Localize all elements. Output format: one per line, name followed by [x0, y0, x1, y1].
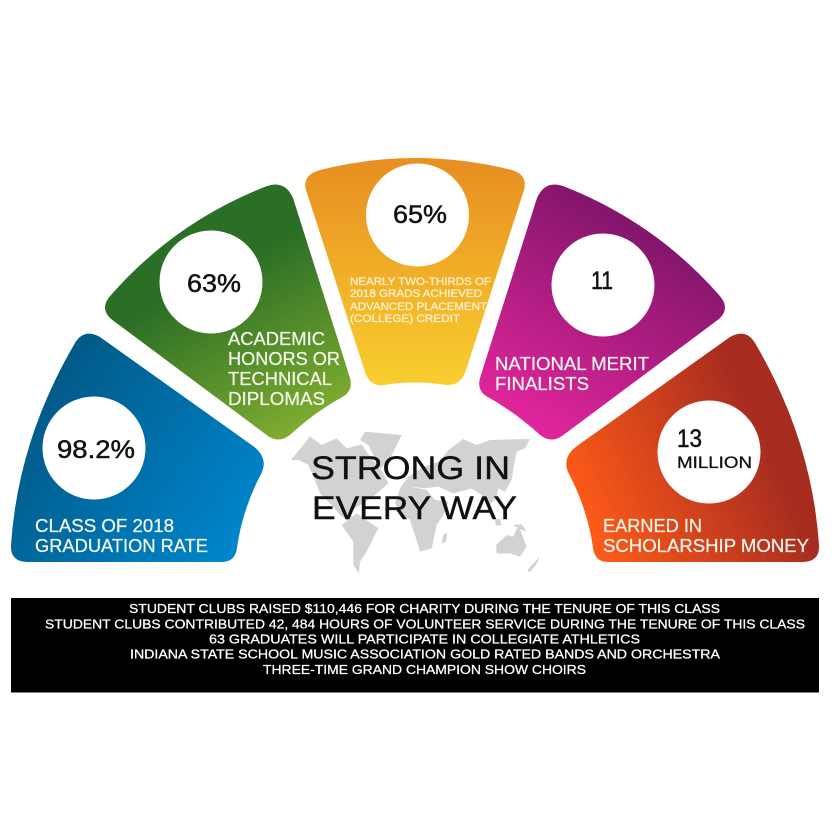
label: scholarship money: SCHOLARSHIP MONEY: [603, 536, 809, 556]
label: academic honors: [228, 329, 340, 409]
badge: 98.2%: [42, 396, 146, 500]
wedge: blue: [11, 334, 264, 562]
label: academic honors: TECHNICAL: [228, 369, 332, 389]
wedge: purple: [479, 184, 725, 440]
panel: advanced placement: [305, 158, 525, 385]
panel: academic honors: [105, 184, 351, 440]
label: scholarship money: [603, 516, 809, 556]
panel: national merit: [479, 184, 725, 440]
banner: additional achievements: STUDENT CLUBS CONTRIBUTED 42, 484 HOURS OF VOLUNTEER SERVICE DURING THE TENURE OF THIS CLASS: [45, 618, 805, 632]
title: EVERY WAY: [312, 490, 517, 526]
banner: additional achievements: [11, 598, 819, 692]
wedge: green: [105, 184, 351, 440]
title: STRONG IN: [311, 450, 510, 486]
banner: additional achievements: 63 GRADUATES WILL PARTICIPATE IN COLLEGIATE ATHLETICS: [209, 632, 640, 646]
label: graduation rate: GRADUATION RATE: [35, 536, 208, 556]
badge: 63%: 63%: [187, 270, 241, 298]
label: graduation rate: CLASS OF 2018: [35, 516, 174, 536]
label: advanced placement: ADVANCED PLACEMENT: [350, 301, 487, 313]
world map: [291, 432, 540, 573]
label: academic honors: ACADEMIC: [228, 329, 325, 349]
badge: 13 million: 13: [677, 425, 702, 453]
badge: 98.2%: 98.2%: [57, 436, 135, 464]
banner: additional achievements: THREE-TIME GRAND CHAMPION SHOW CHOIRS: [263, 663, 586, 677]
badge: 11: [552, 234, 654, 336]
label: advanced placement: [350, 276, 491, 325]
banner: additional achievements: INDIANA STATE SCHOOL MUSIC ASSOCIATION GOLD RATED BANDS AND ORCHESTRA: [130, 648, 721, 662]
badge: 65%: 65%: [393, 201, 447, 229]
banner: additional achievements: STUDENT CLUBS RAISED $110,446 FOR CHARITY DURING THE TENURE OF THIS CLASS: [129, 602, 720, 616]
badge: 63%: [160, 230, 262, 334]
label: national merit: FINALISTS: [495, 374, 589, 394]
label: advanced placement: 2018 GRADS ACHIEVED: [350, 288, 482, 300]
label: advanced placement: (COLLEGE) CREDIT: [350, 313, 460, 325]
label: academic honors: HONORS OR: [228, 349, 340, 369]
badge: 13 million: MILLION: [677, 453, 752, 472]
label: national merit: [495, 354, 649, 394]
wedge: red: [566, 334, 819, 562]
label: national merit: NATIONAL MERIT: [495, 354, 649, 374]
panel: scholarship money: [566, 334, 819, 562]
panel: graduation rate: [11, 334, 264, 562]
label: advanced placement: NEARLY TWO-THIRDS OF: [350, 276, 491, 288]
badge: 13 million: [658, 400, 760, 504]
wedge: orange: [305, 158, 525, 385]
label: scholarship money: EARNED IN: [603, 516, 702, 536]
title: [311, 450, 517, 526]
label: graduation rate: [35, 516, 208, 556]
label: academic honors: DIPLOMAS: [228, 389, 325, 409]
badge: 11: 11: [591, 267, 613, 295]
badge: 65%: [366, 164, 469, 266]
